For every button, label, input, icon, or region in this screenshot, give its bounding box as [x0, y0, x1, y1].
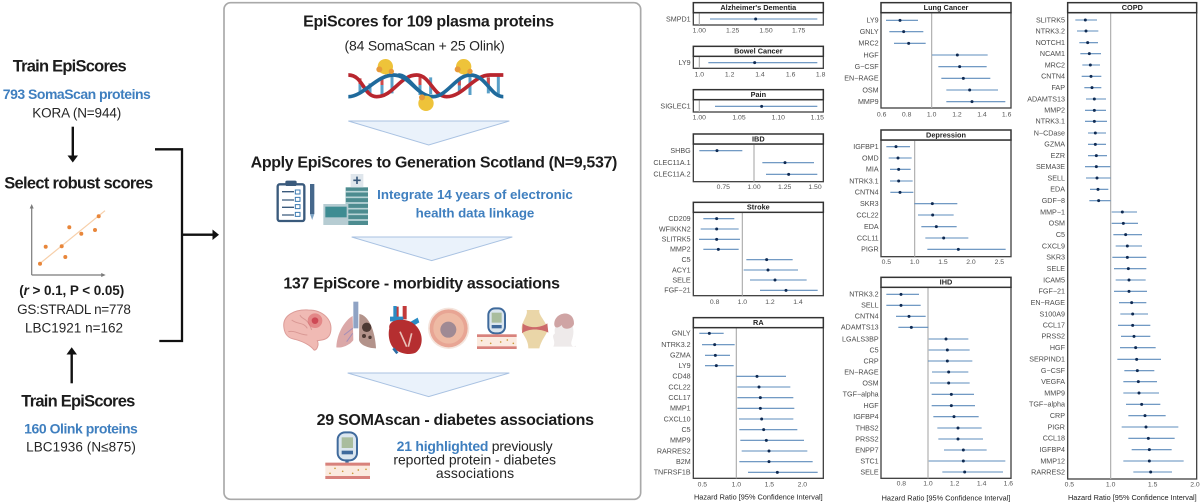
- chart: COPD: MMP2: [1044, 107, 1065, 115]
- chart: IHD: 1.6: [1004, 481, 1013, 488]
- icon: tumour: [428, 308, 469, 349]
- chart: IHD: SELL: [861, 302, 879, 310]
- chart: COPD: SELL: [1047, 174, 1065, 182]
- chart: Bowel Cancer: [678, 46, 826, 78]
- chart: COPD: 2.0: [1190, 481, 1200, 488]
- chart: RA: CCL22: [668, 383, 691, 391]
- chart: IBD: [653, 134, 823, 191]
- icon: brain: [284, 310, 331, 350]
- chart: IHD: STC1: [860, 457, 879, 465]
- chart: Depression: 1.0: [910, 259, 920, 266]
- chart: RA: [654, 318, 823, 502]
- chart: COPD: NCAM1: [1040, 50, 1065, 58]
- chart: Depression: 2.0: [966, 259, 976, 266]
- chart: COPD: SEMA3E: [1036, 163, 1065, 171]
- chart: Alzheimer's Dementia: 1.00: [693, 27, 706, 34]
- chart: IHD: SELE: [860, 468, 879, 476]
- chart: Alzheimer's Dementia: SMPD1: [666, 15, 691, 23]
- chart: COPD: CRP: [1050, 412, 1065, 420]
- chart: Pain: 1.05: [732, 115, 746, 122]
- chart: Alzheimer's Dementia: 1.25: [726, 27, 740, 34]
- chart: IHD: 0.8: [897, 481, 906, 488]
- chart: COPD: TGF−alpha: [1029, 401, 1065, 409]
- chart: Bowel Cancer: 1.8: [816, 71, 826, 78]
- chart: Depression: MIA: [866, 166, 879, 174]
- icon: DNA helix with proteins: [348, 59, 503, 111]
- text: 793 SomaScan proteins: 793 SomaScan proteins: [3, 86, 151, 102]
- panel: training workflow: [3, 58, 219, 455]
- chart: COPD: MRC2: [1045, 61, 1065, 69]
- chart: Depression: PIGR: [861, 246, 879, 254]
- chart: Lung Cancer: G−CSF: [855, 63, 879, 71]
- chart: Bowel Cancer: 1.4: [755, 71, 765, 78]
- chart: Depression: CNTN4: [855, 189, 879, 197]
- chart: IHD: 1.0: [923, 481, 933, 488]
- chart: Depression: 1.5: [938, 259, 948, 266]
- arrow: bracket into main workflow: [155, 149, 219, 341]
- chart: COPD: S100A9: [1040, 310, 1065, 318]
- chart: COPD: NOTCH1: [1036, 39, 1065, 47]
- chart: COPD: RARRES2: [1031, 468, 1065, 476]
- heading: select robust scores: Select robust scores: [4, 174, 153, 192]
- text: KORA cohort: KORA (N=944): [32, 105, 121, 120]
- icon: hospital building: [323, 174, 368, 225]
- chart: Bowel Cancer: 1.6: [786, 71, 796, 78]
- chart: RA: 1.5: [765, 481, 774, 488]
- chart: COPD: NTRK3.2: [1036, 27, 1065, 35]
- chart: COPD: 1.0: [1106, 481, 1116, 488]
- chart: COPD: CNTN4: [1041, 73, 1065, 81]
- chart: Stroke: C5: [682, 256, 691, 264]
- icon: head with brain: [553, 313, 576, 347]
- text: SomaScan and Olink split: (84 SomaScan + 25 Olink): [344, 38, 505, 54]
- chart: COPD: EDA: [1050, 186, 1065, 194]
- chart: IHD: 1.2: [950, 481, 960, 488]
- chart: Depression: SKR3: [860, 200, 879, 208]
- chart: RA: Hazard Ratio [95% Confidence Interval]: [694, 493, 823, 502]
- chart: IHD: THBS2: [856, 424, 879, 432]
- arrow: funnel 2: [352, 237, 512, 261]
- chart: Pain: [660, 90, 824, 122]
- chart: Lung Cancer: Lung Cancer: [924, 3, 969, 12]
- chart: COPD: PIGR: [1047, 423, 1065, 431]
- chart: COPD: MMP−1: [1040, 208, 1065, 216]
- chart: Alzheimer's Dementia: 1.50: [759, 27, 773, 34]
- chart: Depression: [849, 130, 1011, 266]
- chart: COPD: SKR3: [1046, 254, 1065, 262]
- chart: Lung Cancer: EN−RAGE: [844, 75, 879, 83]
- chart: COPD: CCL17: [1043, 322, 1065, 330]
- chart: Stroke: 1.4: [793, 299, 803, 306]
- chart: Alzheimer's Dementia: 1.75: [792, 27, 806, 34]
- chart: RA: RA: [753, 318, 764, 327]
- icon: glucose meter: [477, 308, 517, 349]
- chart: COPD: 1.5: [1148, 481, 1158, 488]
- chart: RA: RARRES2: [657, 447, 691, 455]
- arrow: up to selection: [66, 347, 77, 383]
- text: selection thresholds: (r > 0.1, P < 0.05): [19, 283, 124, 298]
- chart: IHD: IGFBP4: [853, 413, 879, 421]
- chart: COPD: G−CSF: [1041, 367, 1066, 375]
- chart: IBD: 0.75: [717, 184, 730, 191]
- text: 21 highlighted previously reported associations: associations: [436, 465, 514, 481]
- chart: COPD: GZMA: [1044, 141, 1065, 149]
- heading: train EpiScores SomaScan: Train EpiScores: [13, 58, 127, 76]
- chart: Alzheimer's Dementia: Alzheimer's Dementia: [720, 3, 797, 12]
- chart: IHD: NTRK3.2: [849, 291, 879, 299]
- chart: Pain: SIGLEC1: [660, 103, 691, 111]
- chart: COPD: SLITRK5: [1036, 16, 1065, 24]
- chart: Lung Cancer: 1.0: [927, 111, 937, 118]
- chart: IHD: [841, 277, 1013, 502]
- text: 160 Olink proteins: 160 Olink proteins: [24, 420, 138, 436]
- chart: IBD: CLEC11A.2: [653, 171, 691, 179]
- chart: Lung Cancer: 1.2: [952, 111, 962, 118]
- chart: Bowel Cancer: Bowel Cancer: [734, 47, 783, 56]
- chart: COPD: Hazard Ratio [95% Confidence Interval]: [1068, 493, 1197, 502]
- text: GS:STRADL sample size: GS:STRADL n=778: [17, 302, 131, 317]
- chart: Depression: IGFBP1: [853, 143, 879, 151]
- heading: apply EpiScores to Generation Scotland: Apply EpiScores to Generation Scotland (N=9,537): [251, 155, 617, 172]
- chart: COPD: [1027, 3, 1200, 502]
- text: LBC1936 cohort: LBC1936 (N≤875): [26, 440, 136, 455]
- heading: EpiScores for 109 plasma proteins: EpiScores for 109 plasma proteins: [303, 14, 554, 31]
- text: 21 highlighted previously reported associations: 21 highlighted previously: [397, 438, 553, 454]
- chart: Stroke: [659, 202, 823, 306]
- chart: Pain: 1.10: [772, 115, 785, 122]
- text: electronic health data linkage: Integrate 14 years of electronic: [377, 187, 573, 202]
- chart: Lung Cancer: GNLY: [860, 28, 879, 36]
- chart: COPD: CXCL9: [1042, 242, 1065, 250]
- arrow: funnel 3: [348, 373, 509, 397]
- chart: IHD: ADAMTS13: [841, 324, 879, 332]
- icon: knee joint: [522, 310, 548, 348]
- chart: RA: B2M: [676, 458, 691, 466]
- chart: RA: C5: [682, 426, 691, 434]
- chart: IBD: CLEC11A.1: [653, 159, 691, 167]
- chart: RA: 2.0: [798, 481, 807, 488]
- chart: Alzheimer's Dementia: [666, 3, 823, 34]
- panel: forest plots column 3: [1027, 3, 1200, 502]
- chart: Stroke: SELE: [672, 276, 691, 284]
- chart: IHD: PRSS2: [855, 435, 879, 443]
- icon: clipboard and pencil: [278, 181, 314, 221]
- chart: RA: GZMA: [670, 352, 691, 360]
- chart: Pain: 1.00: [693, 115, 706, 122]
- arrow: funnel 1: [348, 121, 509, 145]
- chart: IHD: TGF−alpha: [843, 391, 879, 399]
- chart: Stroke: ACY1: [672, 266, 691, 274]
- arrow: down to selection: [68, 127, 78, 162]
- chart: COPD: IGFBP4: [1040, 446, 1065, 454]
- chart: Depression: CCL22: [856, 211, 879, 219]
- chart: Lung Cancer: 1.4: [977, 111, 987, 118]
- chart: Pain: Pain: [751, 90, 767, 99]
- chart: RA: MMP1: [670, 405, 691, 413]
- chart: scatter plot icon: [30, 204, 106, 277]
- chart: Depression: CCL11: [857, 234, 879, 242]
- chart: COPD: MMP12: [1040, 457, 1065, 465]
- chart: COPD: SERPIND1: [1029, 356, 1065, 364]
- text: LBC1921 sample size: LBC1921 n=162: [25, 321, 123, 336]
- chart: COPD: 0.5: [1065, 481, 1074, 488]
- chart: Stroke: 1.2: [765, 299, 775, 306]
- chart: COPD: GDF−8: [1042, 197, 1065, 205]
- chart: IHD: EN−RAGE: [844, 368, 879, 376]
- chart: COPD: NTRK3.1: [1036, 118, 1065, 126]
- chart: COPD: HGF: [1050, 344, 1066, 352]
- chart: IHD: OSM: [862, 379, 879, 387]
- chart: Bowel Cancer: LY9: [678, 59, 691, 67]
- chart: RA: 1.0: [732, 481, 741, 488]
- chart: IBD: 1.00: [747, 184, 761, 191]
- chart: Bowel Cancer: 1.2: [725, 71, 735, 78]
- chart: IBD: IBD: [752, 134, 765, 143]
- chart: IHD: CNTN4: [855, 313, 879, 321]
- chart: IHD: CRP: [864, 357, 879, 365]
- chart: COPD: EN−RAGE: [1031, 299, 1065, 307]
- chart: COPD: FGF−21: [1039, 288, 1065, 296]
- chart: IHD: 1.4: [977, 481, 987, 488]
- chart: Pain: 1.15: [811, 115, 824, 122]
- heading: 29 SOMAscan diabetes associations: 29 SOMAscan - diabetes associations: [317, 412, 594, 429]
- chart: COPD: MMP9: [1044, 389, 1065, 397]
- heading: train EpiScores Olink: Train EpiScores: [21, 393, 135, 411]
- chart: Stroke: 1.0: [738, 299, 747, 306]
- text: 21 highlighted previously reported associations: [393, 438, 556, 481]
- chart: COPD: N−CDase: [1034, 129, 1065, 137]
- chart: IHD: HGF: [864, 402, 879, 410]
- chart: IHD: IHD: [940, 278, 952, 287]
- chart: Depression: EDA: [864, 223, 879, 231]
- chart: RA: LY9: [678, 362, 691, 370]
- text: electronic health data linkage: [377, 187, 573, 220]
- chart: RA: CCL17: [668, 394, 691, 402]
- chart: Depression: 2.5: [995, 259, 1004, 266]
- chart: RA: GNLY: [672, 330, 691, 338]
- panel: forest plots column 2: [841, 3, 1013, 502]
- chart: Lung Cancer: OSM: [862, 86, 879, 94]
- chart: IHD: LGALS3BP: [842, 335, 879, 343]
- chart: RA: CXCL10: [664, 415, 691, 423]
- chart: Lung Cancer: LY9: [866, 17, 879, 25]
- chart: RA: MMP9: [670, 437, 691, 445]
- chart: RA: CD48: [672, 373, 691, 381]
- chart: COPD: ICAM5: [1043, 276, 1065, 284]
- chart: Lung Cancer: MRC2: [858, 40, 879, 48]
- chart: Depression: OMD: [862, 154, 879, 162]
- chart: Depression: 0.5: [882, 259, 891, 266]
- chart: COPD: CCL18: [1043, 435, 1065, 443]
- chart: IBD: SHBG: [670, 147, 691, 155]
- chart: COPD: ADAMTS13: [1027, 95, 1065, 103]
- chart: COPD: SELE: [1047, 265, 1065, 273]
- icon: heart: [389, 306, 422, 354]
- icon: glucose meter small: [325, 432, 370, 479]
- chart: COPD: FAP: [1051, 84, 1065, 92]
- chart: IBD: 1.50: [808, 184, 822, 191]
- chart: Lung Cancer: 1.6: [1002, 111, 1012, 118]
- chart: Depression: NTRK3.1: [849, 177, 879, 185]
- chart: IHD: ENPP7: [855, 446, 879, 454]
- chart: IHD: Hazard Ratio [95% Confidence Interval]: [882, 493, 1010, 502]
- panel: main workflow box: [224, 3, 641, 499]
- chart: COPD: OSM: [1049, 220, 1065, 228]
- text: 21 highlighted previously reported associations: reported protein - diabetes: [393, 451, 556, 467]
- chart: Stroke: SLITRK5: [662, 236, 691, 244]
- chart: Stroke: Stroke: [747, 203, 770, 212]
- text: electronic health data linkage: health data linkage: [416, 205, 534, 220]
- chart: COPD: C5: [1056, 231, 1065, 239]
- chart: Depression: Depression: [926, 130, 966, 139]
- chart: RA: TNFRSF1B: [654, 469, 691, 477]
- chart: IBD: 1.25: [778, 184, 792, 191]
- chart: IHD: C5: [870, 346, 879, 354]
- chart: Lung Cancer: 0.6: [877, 111, 887, 118]
- chart: Lung Cancer: MMP9: [858, 98, 879, 106]
- chart: Lung Cancer: 0.8: [902, 111, 912, 118]
- chart: COPD: VEGFA: [1041, 378, 1065, 386]
- chart: Stroke: CD209: [668, 215, 691, 223]
- panel: forest plots column 1: [653, 3, 826, 502]
- heading: 137 morbidity associations: 137 EpiScore - morbidity associations: [283, 275, 560, 292]
- chart: Lung Cancer: [844, 3, 1012, 118]
- chart: Stroke: FGF−21: [664, 287, 691, 295]
- chart: Stroke: 0.8: [710, 299, 720, 306]
- chart: COPD: PRSS2: [1042, 333, 1065, 341]
- icon: lungs: [336, 302, 376, 348]
- chart: Stroke: WFIKKN2: [659, 225, 691, 233]
- chart: RA: 0.5: [698, 481, 707, 488]
- chart: Stroke: MMP2: [670, 246, 691, 254]
- chart: Lung Cancer: HGF: [864, 51, 879, 59]
- chart: COPD: COPD: [1122, 3, 1143, 12]
- chart: COPD: EZR: [1051, 152, 1065, 160]
- chart: RA: NTRK3.2: [661, 341, 691, 349]
- chart: Bowel Cancer: 1.0: [695, 71, 704, 78]
